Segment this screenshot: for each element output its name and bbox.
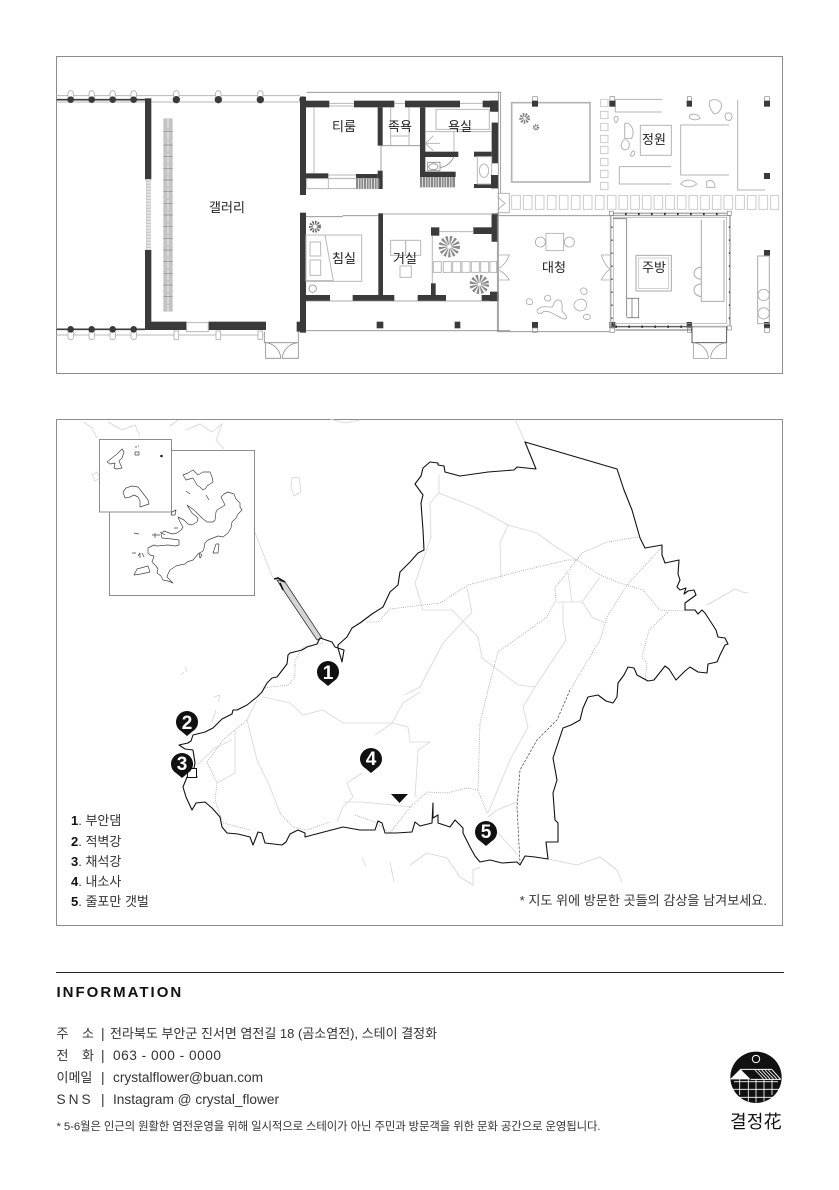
room labels: 침실 xyxy=(332,251,356,266)
map legend: 2. 적벽강 xyxy=(71,834,121,849)
map pin 4 xyxy=(360,748,382,773)
information section xyxy=(56,972,784,1133)
map legend: 3. 채석강 xyxy=(71,854,121,869)
map pin 5 xyxy=(475,821,497,846)
inset: outer islands xyxy=(100,440,176,515)
contact details: Instagram @ crystal_flower xyxy=(113,1092,279,1107)
inset: islands xyxy=(100,440,254,596)
contact details: | xyxy=(101,1048,105,1063)
contact details: 화 xyxy=(82,1048,94,1063)
plants xyxy=(311,223,485,290)
contact details: 이메일 xyxy=(56,1070,92,1085)
contact details: SNS xyxy=(56,1092,94,1107)
faint neighbouring islands and coast xyxy=(84,419,748,885)
plants xyxy=(521,115,538,129)
contact details: | xyxy=(101,1070,105,1085)
map pin 1: 1 xyxy=(323,663,334,684)
contact details xyxy=(56,1026,437,1107)
room fixtures xyxy=(187,92,510,358)
room labels: 티룸 xyxy=(332,119,356,134)
footnote: * 5-6월은 인근의 원활한 염전운영을 위해 일시적으로 스테이가 아닌 주민과 방문객을 위한 문화 공간으로 운영됩니다. xyxy=(56,1119,600,1133)
information heading: INFORMATION xyxy=(56,984,183,1001)
room labels: 대청 xyxy=(542,260,566,275)
logo wordmark: 결정花 xyxy=(730,1112,782,1132)
Buan coastline boundary xyxy=(179,442,728,865)
contact details: 063 - 000 - 0000 xyxy=(113,1048,221,1063)
contact details: | xyxy=(101,1092,105,1107)
map pin 2 xyxy=(176,711,198,736)
map legend: 1. 부안댐 xyxy=(71,813,121,828)
contact details: crystalflower@buan.com xyxy=(113,1070,263,1085)
daecheong furniture xyxy=(497,193,729,332)
floor plan: east courtyard and garden xyxy=(490,97,779,358)
map pin 4: 4 xyxy=(366,749,377,770)
map pin 3: 3 xyxy=(177,754,187,775)
contact details: | xyxy=(101,1026,105,1041)
stepping stones xyxy=(512,99,779,209)
room labels: 갤러리 xyxy=(209,200,245,215)
causeway xyxy=(274,578,322,640)
map pin 2: 2 xyxy=(182,713,192,734)
contact details: 전 xyxy=(56,1048,68,1063)
pillars xyxy=(490,101,770,328)
kitchen xyxy=(611,213,769,358)
floor plan: west building xyxy=(57,91,510,358)
map legend: 5. 줄포만 갯벌 xyxy=(71,894,149,909)
map legend xyxy=(71,813,149,909)
room labels: 정원 xyxy=(642,132,666,147)
road network xyxy=(197,475,685,863)
map legend: 4. 내소사 xyxy=(71,874,121,889)
map pin 5: 5 xyxy=(481,822,492,843)
garden xyxy=(614,99,765,190)
coastal salt-farm box xyxy=(188,768,196,778)
gallery light strip xyxy=(146,118,173,312)
map pin 3 xyxy=(171,753,193,778)
panel: map xyxy=(56,419,782,926)
contact details: 주 xyxy=(56,1026,68,1041)
room labels: 주방 xyxy=(642,260,666,275)
current location marker xyxy=(391,794,408,803)
room labels: 욕실 xyxy=(448,119,472,134)
room labels: 족욕 xyxy=(388,119,412,134)
contact details: 전라북도 부안군 진서면 염전길 18 (곰소염전), 스테이 결정화 xyxy=(110,1026,437,1041)
map note: * 지도 위에 방문한 곳들의 감상을 남겨보세요. xyxy=(520,893,767,908)
contact details: 소 xyxy=(82,1026,94,1041)
logo xyxy=(730,1052,782,1132)
panel: floor plan xyxy=(56,56,782,374)
room labels: 거실 xyxy=(393,251,417,266)
map pin 1 xyxy=(317,661,339,686)
room labels xyxy=(209,119,666,275)
